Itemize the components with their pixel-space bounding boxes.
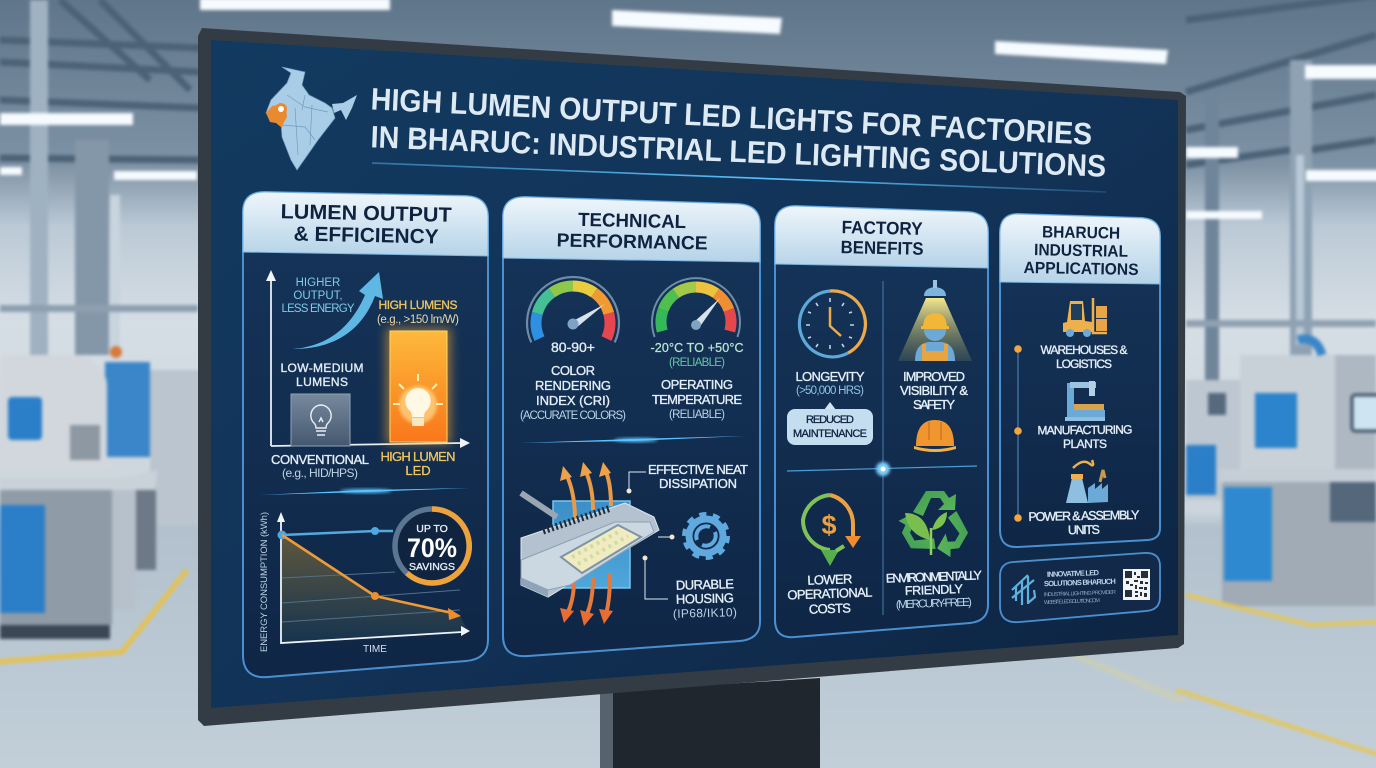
- text: CRI: (ACCURATE COLORS): [520, 410, 626, 422]
- text: improved visibility: [900, 369, 968, 412]
- timeline: [1014, 345, 1022, 522]
- icon: power plant: [1066, 460, 1108, 503]
- callout: higher output, less energy: OUTPUT,: [293, 290, 343, 302]
- title: HIGH LUMEN OUTPUT LED LIGHTS FOR FACTORIES: [370, 81, 1093, 152]
- panel header: [1000, 214, 1160, 284]
- heat arrows down: [567, 573, 610, 616]
- left machines: [150, 370, 200, 525]
- company text: WEBSITE LEDSOLUTION.COM: [1044, 598, 1100, 606]
- icon: recycling with leaves: [896, 491, 975, 560]
- text: manufacturing plants: PLANTS: [1063, 437, 1107, 451]
- orange LED line: [282, 535, 461, 620]
- icon: cost savings arrows: [803, 495, 861, 566]
- label: high lumens: [377, 298, 459, 326]
- text: operating temperature: TEMPERATURE: [652, 392, 742, 407]
- panel heading: [556, 210, 708, 255]
- gauge: color rendering index: 80-90+: [551, 339, 595, 355]
- icon: worker under light: [898, 280, 972, 361]
- callout line: housing: [658, 534, 674, 540]
- gauge: color rendering index: [527, 277, 619, 355]
- text: warehouses and logistics: LOGISTICS: [1056, 357, 1112, 371]
- callout: effective heat dissipation: [626, 462, 748, 494]
- label: high lumens: (e.g., >150 lm/W): [377, 314, 459, 326]
- panel header: [775, 206, 988, 268]
- callout: effective heat dissipation: EFFECTIVE NEAT: [648, 462, 748, 477]
- callout: reduced maintenance: MAINTENANCE: [793, 428, 867, 440]
- panel: Bharuch industrial applications: [1000, 214, 1160, 547]
- title: [370, 81, 1107, 184]
- QR code: [1123, 569, 1150, 600]
- label: high lumens: HIGH LUMENS: [378, 298, 458, 312]
- callout: effective heat dissipation: DISSIPATION: [659, 476, 737, 491]
- text: operating temperature: OPERATING: [661, 377, 733, 392]
- panel heading: [280, 200, 452, 249]
- callout: durable housing: HOUSING: [676, 590, 734, 607]
- axis labels: [271, 449, 456, 480]
- axis labels: CONVENTIONAL: [271, 452, 369, 467]
- text: manufacturing plants: MANUFACTURING: [1037, 423, 1133, 437]
- monitor stand: [600, 678, 820, 768]
- text: longevity: [796, 369, 865, 397]
- heat sink fins: [543, 508, 611, 531]
- text: improved visibility: SAFETY: [913, 397, 955, 412]
- icon: clock: [799, 291, 865, 357]
- gauge: operating temperature: -20°C TO +50°C: [650, 341, 744, 355]
- bezel: [198, 28, 1186, 726]
- callout: higher output, less energy: [282, 272, 383, 349]
- text: CRI: [520, 363, 626, 422]
- panel heading: INDUSTRIAL: [1034, 241, 1128, 261]
- heat arrows up: [566, 472, 611, 520]
- text: power and assembly: [1028, 508, 1140, 537]
- savings badge: UP TO: [416, 523, 448, 535]
- icon: glowing bulb: [393, 374, 443, 426]
- cable: [521, 493, 557, 517]
- LED array: [561, 525, 641, 573]
- panel header: [503, 197, 760, 262]
- panel: lumen output and efficiency: [243, 192, 488, 677]
- blue conventional line: [278, 527, 393, 540]
- text: power and assembly: UNITS: [1068, 523, 1100, 537]
- LED street light fixture with heat arrows: [521, 462, 659, 626]
- savings badge: SAVINGS: [409, 561, 455, 573]
- gauge: operating temperature: (RELIABLE): [669, 357, 725, 369]
- text: environmentally friendly: ENVIRONMENTALLY: [886, 568, 983, 586]
- text: power and assembly: POWER & ASSEMBLY: [1028, 508, 1140, 524]
- panel heading: [840, 217, 924, 259]
- callout: reduced maintenance: REDUCED: [806, 414, 854, 426]
- text: environmentally friendly: [886, 568, 983, 611]
- callout: reduced maintenance: [787, 402, 873, 445]
- icon: forklift: [1063, 298, 1107, 337]
- text: lower operational costs: [787, 571, 873, 617]
- panel heading: FACTORY: [841, 217, 923, 239]
- text: environmentally friendly: (MERCURY-FREE): [896, 597, 972, 611]
- icon: manufacturing robot: [1065, 381, 1105, 421]
- icon: outline bulb: [311, 405, 331, 435]
- axis titles: ENERGY CONSUMPTION (kWh): [259, 512, 270, 652]
- text: longevity: (>50,000 HRS): [796, 385, 864, 397]
- text: lower operational costs: OPERATIONAL: [787, 585, 873, 602]
- text: lower operational costs: LOWER: [807, 571, 853, 588]
- text: manufacturing plants: [1037, 423, 1133, 451]
- text: improved visibility: VISIBILITY &: [900, 383, 968, 398]
- label: low-medium lumens: LOW-MEDIUM: [280, 361, 364, 375]
- panel heading: LUMEN OUTPUT: [280, 200, 452, 227]
- panel: company logo and QR code: [1000, 553, 1160, 622]
- savings badge: [395, 509, 469, 583]
- axis labels: LED: [405, 463, 431, 478]
- label: low-medium lumens: LUMENS: [296, 375, 348, 389]
- screen: [211, 40, 1178, 708]
- energy savings line chart: TIME: [363, 644, 387, 655]
- text: CRI: COLOR: [551, 363, 595, 378]
- callout: higher output, less energy: LESS ENERGY: [282, 303, 355, 315]
- text: warehouses and logistics: WAREHOUSES &: [1040, 343, 1128, 357]
- fixture body: [521, 503, 659, 597]
- panel heading: PERFORMANCE: [556, 230, 708, 255]
- text: operating temperature: [652, 377, 742, 421]
- title: IN BHARUC: INDUSTRIAL LED LIGHTING SOLUTIONS: [370, 119, 1107, 184]
- icon: hard hat: [914, 420, 956, 452]
- label: low-medium lumens: [280, 361, 364, 389]
- company text: [1044, 568, 1116, 606]
- panel heading: BHARUCH: [1042, 223, 1120, 243]
- text: operating temperature: (RELIABLE): [669, 409, 725, 421]
- panel header: [243, 192, 488, 256]
- bar comparison chart: [266, 270, 470, 480]
- ceiling lights: [0, 0, 1376, 219]
- panel heading: [1023, 223, 1139, 279]
- panel heading: & EFFICIENCY: [293, 222, 439, 249]
- savings badge: 70%: [407, 533, 457, 563]
- conventional bar: [291, 394, 350, 446]
- gauge: operating temperature: [650, 278, 744, 369]
- Gujarat highlight and pin: [266, 103, 287, 128]
- text: CRI: INDEX (CRI): [536, 393, 610, 408]
- panel: technical performance: [503, 197, 760, 656]
- callout: durable housing: [642, 556, 737, 621]
- text: CRI: RENDERING: [535, 378, 611, 393]
- icon: cost savings arrows: $: [821, 510, 837, 540]
- company text: INDUSTRIAL LIGHTING PROVIDER: [1044, 590, 1116, 598]
- callout: higher output, less energy: HIGHER: [296, 277, 340, 289]
- text: environmentally friendly: FRIENDLY: [905, 582, 964, 598]
- icon: company logo: [1012, 575, 1035, 605]
- high lumen LED bar: [386, 328, 451, 444]
- monitor: [198, 28, 1186, 726]
- axis labels: (e.g., HID/HPS): [282, 466, 358, 480]
- text: improved visibility: IMPROVED: [903, 369, 965, 384]
- panel: factory benefits: [775, 206, 988, 637]
- icon: gear: [684, 514, 728, 558]
- panel heading: TECHNICAL: [578, 210, 687, 233]
- company text: SOLUTIONS BHARUCH: [1044, 577, 1116, 588]
- axis labels: HIGH LUMEN: [380, 449, 456, 464]
- text: warehouses and logistics: [1040, 343, 1128, 371]
- callout: durable housing: DURABLE: [676, 576, 734, 593]
- text: lower operational costs: COSTS: [809, 600, 851, 617]
- energy savings line chart: [259, 509, 470, 655]
- text: longevity: LONGEVITY: [796, 369, 865, 384]
- map of India: [266, 67, 357, 170]
- callout: durable housing: (IP68/IK10): [673, 605, 737, 621]
- panel heading: APPLICATIONS: [1023, 259, 1139, 279]
- right machines: [1186, 380, 1241, 500]
- panel heading: BENEFITS: [840, 237, 924, 259]
- company text: INNOVATIVE LED: [1047, 568, 1100, 579]
